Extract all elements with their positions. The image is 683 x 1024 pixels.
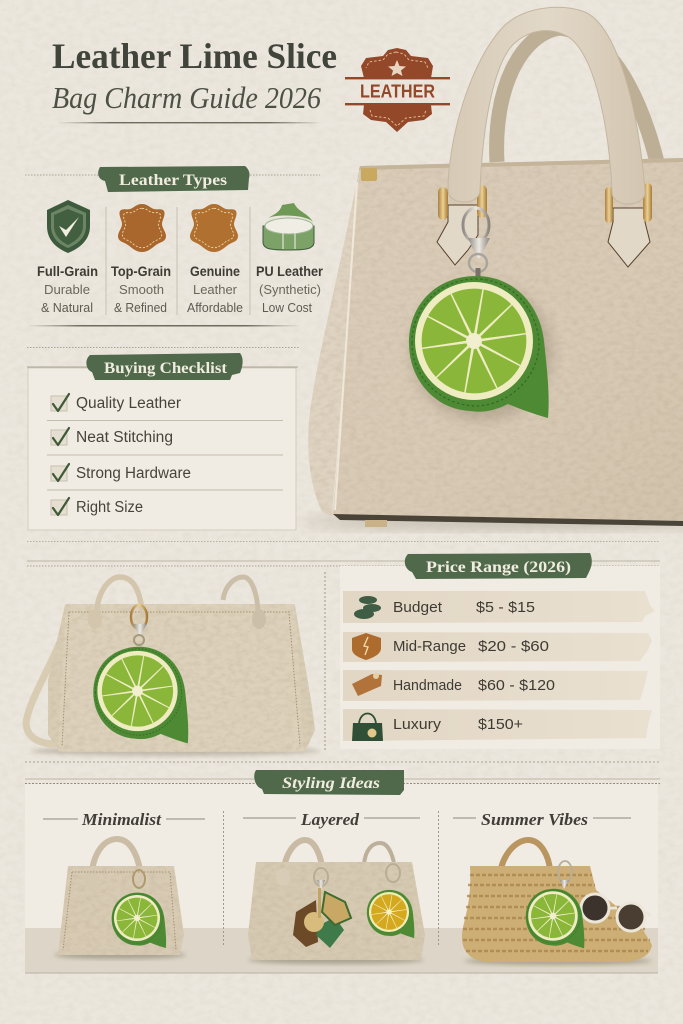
- styling panel: [25, 783, 658, 929]
- row: mid-range: $20 - $60: [478, 638, 549, 655]
- label: PU leather: Low Cost: [262, 301, 313, 315]
- item: neat stitching: Neat Stitching: [76, 429, 173, 446]
- right tab hardware: [605, 183, 652, 267]
- heading pill: [86, 353, 243, 380]
- row: budget: $5 - $15: [476, 599, 535, 616]
- label: PU leather: (Synthetic): [259, 283, 321, 297]
- subheading: layered: Layered: [300, 810, 360, 829]
- item: right size: Right Size: [76, 499, 143, 516]
- leather badge: LEATHER: [360, 82, 435, 102]
- row: luxury: $150+: [478, 716, 523, 733]
- back handle: [497, 28, 657, 162]
- heading pill: [254, 770, 404, 795]
- heading pill: Buying Checklist: [104, 360, 228, 377]
- front handle: [448, 7, 645, 204]
- label: top-grain: Top-Grain: [111, 263, 171, 279]
- row: budget: [343, 591, 655, 623]
- label: genuine: Affordable: [187, 301, 243, 315]
- label: PU leather: [256, 263, 323, 315]
- row: mid-range: Mid-Range: [393, 638, 466, 655]
- subheading: minimalist: Minimalist: [81, 810, 162, 829]
- label: genuine: Leather: [193, 283, 237, 297]
- title: [52, 36, 337, 123]
- shadow behind charm: [412, 284, 552, 420]
- icon: shield: [47, 200, 90, 253]
- heading pill: [98, 166, 250, 192]
- bag: layered: [248, 840, 425, 964]
- bag body: [48, 604, 315, 752]
- label: top-grain: [111, 263, 171, 315]
- title: Bag Charm Guide 2026: [52, 80, 321, 115]
- lime charm: [93, 647, 188, 743]
- label: full-grain: Durable: [44, 283, 90, 297]
- row: handmade: Handmade: [393, 677, 462, 694]
- row: handmade: [343, 670, 648, 701]
- bag: summer straw: [462, 840, 652, 965]
- bag body: [308, 158, 683, 527]
- heading pill: Price Range (2026): [426, 559, 571, 576]
- section: price range: [340, 553, 660, 749]
- subheading: summer vibes: Summer Vibes: [481, 810, 588, 829]
- shoulder strap: [26, 642, 60, 744]
- medium bag illustration: [26, 577, 320, 756]
- row: mid-range: [343, 632, 652, 662]
- label: full-grain: & Natural: [41, 301, 93, 315]
- sunglasses: [581, 894, 651, 931]
- section: buying checklist: [27, 348, 300, 530]
- silver clasp: [463, 208, 490, 292]
- silver clasp: [131, 605, 147, 645]
- label: full-grain: [37, 263, 98, 315]
- heading pill: Styling Ideas: [282, 775, 380, 792]
- item: right size: [51, 498, 143, 516]
- layered charms: [293, 868, 351, 948]
- price panel: [340, 566, 660, 749]
- label: top-grain: & Refined: [114, 301, 167, 315]
- left tab hardware: [437, 185, 487, 265]
- item: strong hardware: Strong Hardware: [76, 465, 191, 482]
- heading pill: [405, 553, 592, 579]
- item: quality leather: Quality Leather: [76, 395, 181, 412]
- label: PU leather: PU Leather: [256, 263, 323, 279]
- label: full-grain: Full-Grain: [37, 263, 98, 279]
- section: styling ideas: [25, 770, 660, 973]
- bag: minimalist: [54, 839, 186, 959]
- heading pill: Leather Types: [119, 172, 227, 189]
- label: genuine: Genuine: [190, 263, 240, 279]
- icon: PU leather: [263, 203, 314, 250]
- main bag hero: [300, 7, 683, 529]
- section: leather types: [25, 166, 323, 326]
- label: top-grain: Smooth: [119, 283, 164, 297]
- leather badge: [345, 48, 450, 132]
- row: luxury: Luxury: [393, 716, 442, 733]
- checklist panel: [28, 368, 296, 530]
- handles: [88, 577, 266, 629]
- icon: genuine hide: [190, 204, 238, 252]
- lime charm: [409, 276, 549, 418]
- row: luxury: [343, 709, 652, 741]
- floor: [25, 928, 658, 973]
- title: Leather Lime Slice: [52, 36, 337, 76]
- icon: top-grain hide: [118, 204, 166, 252]
- label: genuine: [187, 263, 243, 315]
- row: budget: Budget: [393, 599, 443, 616]
- row: handmade: $60 - $120: [478, 677, 555, 694]
